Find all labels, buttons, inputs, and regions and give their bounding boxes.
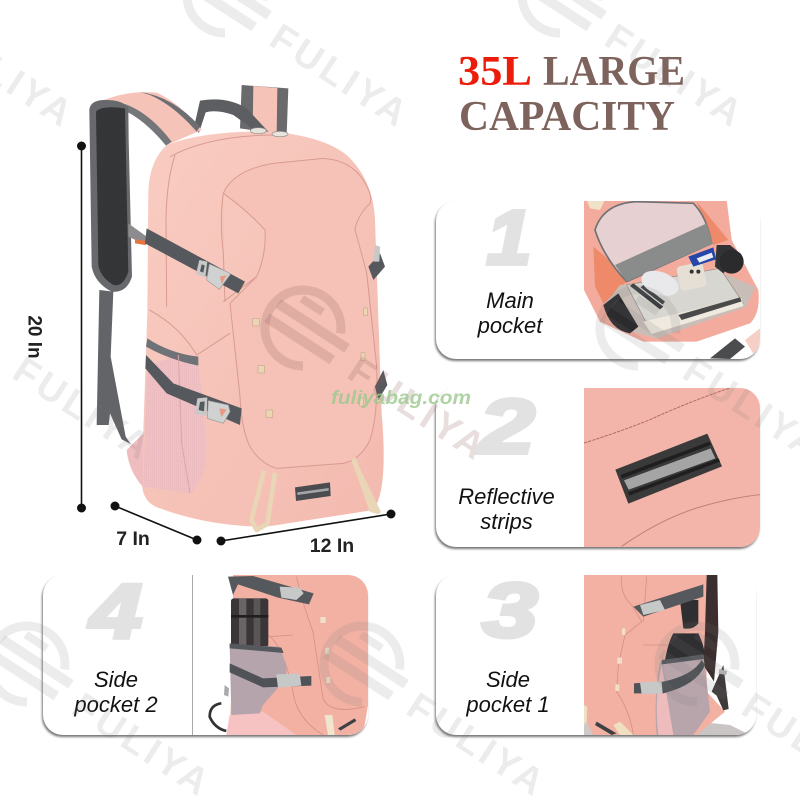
label: main pocket: pocket [478,312,542,338]
backpack body [142,131,384,527]
dimension: 20 in height [24,142,86,512]
watermark: top centre: FULIYA [262,16,417,137]
website url: fuliyabag.com [331,388,471,409]
upper compression strap and buckle [145,228,245,293]
top carry handle [193,85,288,135]
watermark: top right: FULIYA [597,16,752,137]
panel: 4 side pocket 2 [43,575,368,735]
body stitching [149,135,377,443]
dimension: 7 in depth: 7 In [116,528,150,550]
label: side pocket 2 [74,667,158,716]
shoulder strap and back pad [89,92,202,444]
label: side pocket 1: Side [486,667,530,692]
panel: 2 reflective strips [436,388,760,547]
label: side pocket 1: pocket 1 [466,692,550,716]
title: LARGE [543,49,685,95]
photo: reflective strip close-up [584,388,760,547]
dimension: 7 in depth [110,502,202,550]
label: main pocket: Main [486,288,534,313]
label: main pocket [477,288,544,338]
watermark: bottom centre [309,611,567,800]
photo: open main compartment [584,201,760,359]
photo: bottle in side pocket [208,575,368,735]
right side strap tabs [368,245,387,400]
watermark: bottom left [0,611,232,800]
title: CAPACITY [459,94,675,140]
label: reflective strips [458,484,555,534]
label: side pocket 2: Side [94,667,138,692]
lower compression strap and buckle [145,355,242,425]
label: reflective strips: Reflective [458,484,555,509]
title [458,49,685,140]
label: side pocket 2: pocket 2 [74,692,158,716]
front panel [221,158,377,468]
photo: umbrella in side pocket [584,575,756,735]
title: 35L [458,49,532,95]
panel: 3 side pocket 1 [436,575,756,735]
watermark: top centre [172,0,430,147]
label: reflective strips: strips [480,508,533,534]
label: side pocket 1 [466,667,550,716]
dimension: 12 in width: 12 In [310,535,354,557]
zipper pulls [250,128,288,137]
panel: 1 main pocket [436,201,760,359]
watermark: bottom right [644,611,800,800]
cream bottom pull loops [251,458,378,530]
watermark: centre: FULIYA [340,349,495,470]
watermark: centre [250,275,508,480]
dimension: 20 in height: 20 In [24,315,44,359]
watermark: middle left: FULIYA [5,349,160,470]
watermark: top right [507,0,765,147]
cream lash loops [253,308,367,417]
dimension: 12 in width [216,510,396,557]
watermark: middle right [585,275,800,480]
side mesh pocket [127,338,207,493]
divider line [192,575,193,735]
reflective patch [295,482,331,501]
